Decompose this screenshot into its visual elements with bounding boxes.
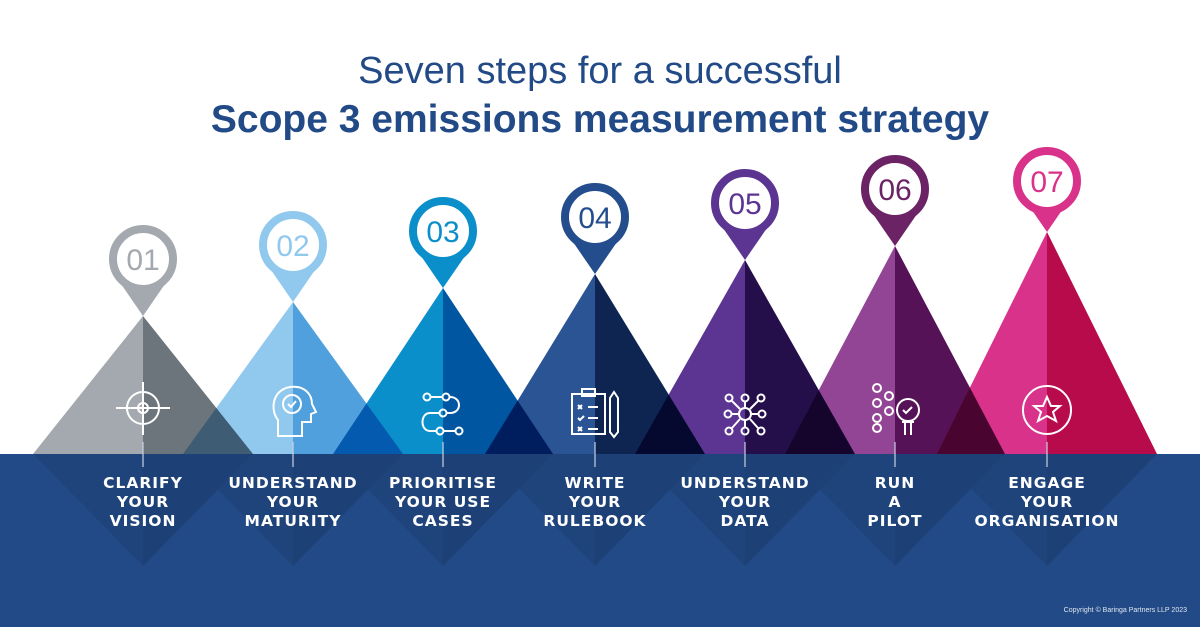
label 1: CLARIFY bbox=[103, 474, 183, 492]
pin 04 bbox=[565, 187, 625, 274]
label 6: PILOT bbox=[867, 512, 923, 530]
icon: target bbox=[116, 382, 170, 435]
label 1: VISION bbox=[110, 512, 176, 530]
label 2: MATURITY bbox=[245, 512, 341, 530]
title: Scope 3 emissions measurement strategy bbox=[211, 98, 989, 141]
connector lines bbox=[143, 442, 1047, 467]
pin 05 bbox=[715, 173, 775, 260]
label 2: UNDERSTAND bbox=[228, 474, 358, 492]
pin 02: 02 bbox=[276, 230, 310, 263]
icon: flow bbox=[422, 394, 462, 434]
label 2: YOUR bbox=[266, 493, 319, 511]
label 4: WRITE bbox=[565, 474, 625, 492]
pin 06 bbox=[865, 159, 925, 246]
pyramids bbox=[33, 232, 1157, 454]
pin 03 bbox=[413, 201, 473, 288]
pin 05: 05 bbox=[728, 188, 762, 221]
icon: pilot bbox=[873, 384, 919, 435]
pin 04: 04 bbox=[578, 202, 612, 235]
icon: clipboard pencil bbox=[572, 389, 618, 437]
label 6: A bbox=[888, 493, 902, 511]
pin 01 bbox=[113, 229, 173, 316]
pin 03: 03 bbox=[426, 216, 460, 249]
labels bbox=[103, 474, 1120, 530]
label 3: YOUR USE bbox=[394, 493, 491, 511]
label 3: CASES bbox=[412, 512, 474, 530]
icon: star bbox=[1023, 386, 1071, 434]
title: Seven steps for a successful bbox=[358, 50, 842, 92]
reflections bbox=[33, 454, 1157, 566]
label 5: YOUR bbox=[718, 493, 771, 511]
label 3: PRIORITISE bbox=[389, 474, 497, 492]
pin 02 bbox=[263, 215, 323, 302]
label 7: YOUR bbox=[1020, 493, 1073, 511]
label 5: DATA bbox=[720, 512, 770, 530]
label 1: YOUR bbox=[116, 493, 169, 511]
title bbox=[211, 50, 989, 141]
copyright: Copyright © Baringa Partners LLP 2023 bbox=[1064, 606, 1187, 614]
icons bbox=[116, 382, 1071, 437]
bottom band bbox=[0, 454, 1200, 627]
icon: head check bbox=[274, 387, 316, 436]
label 5: UNDERSTAND bbox=[680, 474, 810, 492]
label 6: RUN bbox=[875, 474, 915, 492]
label 4: RULEBOOK bbox=[543, 512, 647, 530]
pin 06: 06 bbox=[878, 174, 912, 207]
label 7: ENGAGE bbox=[1008, 474, 1086, 492]
icon: network bbox=[724, 394, 766, 434]
pins bbox=[113, 151, 1077, 316]
pin 01: 01 bbox=[126, 244, 160, 277]
label 7: ORGANISATION bbox=[974, 512, 1120, 530]
pin 07 bbox=[1017, 151, 1077, 232]
pin 07: 07 bbox=[1030, 166, 1064, 199]
label 4: YOUR bbox=[568, 493, 621, 511]
